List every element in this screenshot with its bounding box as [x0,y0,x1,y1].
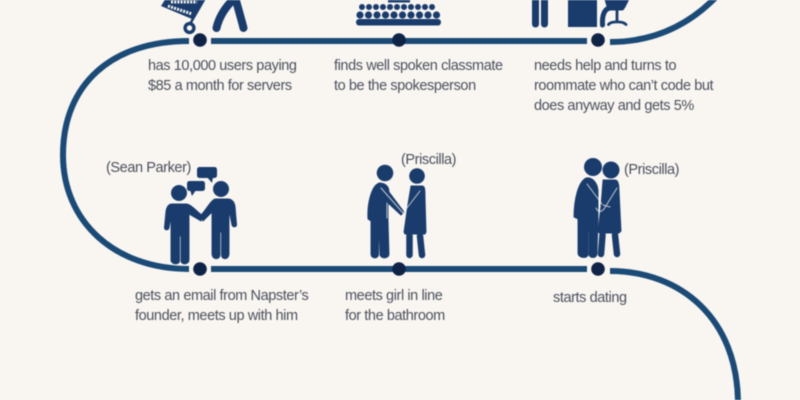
timeline dots [193,33,605,276]
text: Napster founder: gets an email from Napster’s [135,288,308,304]
text: meets girl: meets girl in line [345,288,442,304]
text: roommate: does anyway and gets 5% [534,98,694,114]
text: starts dating: starts dating [553,290,627,306]
icon: roommate, desk and seated coder [536,0,630,27]
text: roommate: roommate who can’t code but [534,78,714,94]
text: roommate: needs help and turns to [534,58,676,74]
icon: couple embracing [574,158,621,258]
text: users and servers: $85 a month for servers [148,78,292,94]
label: Priscilla, dating: (Priscilla) [624,162,679,178]
icon: person pushing server cart [161,0,244,32]
text: users and servers: has 10,000 users paying [148,58,297,74]
icon: audience facing speaker [356,0,441,26]
label: Sean Parker: (Sean Parker) [106,160,191,176]
label: Priscilla, meeting: (Priscilla) [401,152,456,168]
text: Napster founder: founder, meets up with him [135,308,298,324]
icon: man and woman holding hands [368,165,426,258]
text: spokesperson: finds well spoken classmate [334,58,503,74]
text: meets girl: for the bathroom [345,308,445,324]
icon: two men shaking hands with speech bubbles [164,167,237,264]
text: spokesperson: to be the spokesperson [334,78,476,94]
